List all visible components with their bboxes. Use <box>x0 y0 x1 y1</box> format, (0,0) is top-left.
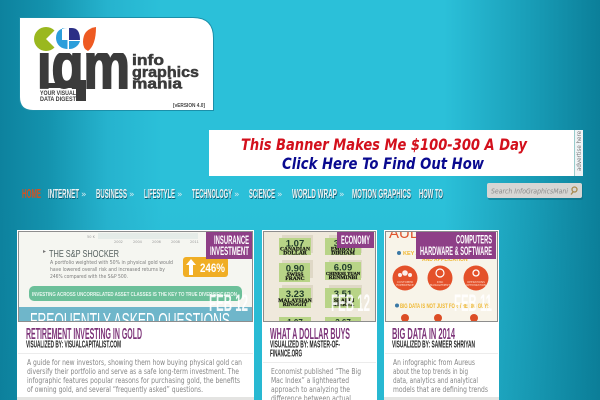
navigation bar: MOTION GRAPHICS <box>352 186 411 201</box>
card 2 thumbnail: CHINESE YUAN <box>326 271 361 276</box>
card 1 description: A guide for new investors, showing them how buying physical gold can <box>27 358 242 367</box>
card 1 thumbnail <box>18 231 253 332</box>
card 2 credit: FINANCE.ORG <box>270 348 302 360</box>
banner call to action: Click Here To Find Out How <box>282 154 484 173</box>
card 2 description: Mac Index” a lighthearted <box>271 376 349 385</box>
navigation bar: SCIENCE <box>249 186 275 201</box>
card 1 description: infographic features popular reasons for purchasing gold, the benefits <box>27 376 240 385</box>
card 2 thumbnail: 3.23 <box>286 289 304 300</box>
card 2: what a dollar buys <box>262 230 377 400</box>
navigation bar: TECHNOLOGY <box>193 187 233 202</box>
icon: coloured logo shapes <box>34 27 96 51</box>
card 2 thumbnail: SWISS <box>287 272 303 278</box>
logo wordmark: graphics <box>132 65 199 81</box>
card 2 thumbnail: 1.07 <box>286 238 304 250</box>
navigation bar: WORLD WRAP <box>293 187 338 202</box>
card 1 thumbnail: 2008 <box>171 240 180 244</box>
logo tagline: DATA DIGEST <box>40 97 76 103</box>
card 1 category tag <box>206 232 252 259</box>
navigation bar: WORLD WRAP <box>292 186 337 201</box>
card 3 category tag: COMPUTERS <box>456 234 492 246</box>
navigation bar: SCIENCE <box>250 187 276 202</box>
card 2: what a dollar buys: VISUALIZED BY: MASTER-OF- <box>270 340 340 350</box>
navigation bar: MOTION GRAPHICS <box>353 187 412 202</box>
navigation bar: » <box>339 190 345 200</box>
card 3 thumbnail: AUD <box>389 225 421 242</box>
card 2 description <box>271 367 361 400</box>
navigation bar: LIFESTYLE <box>144 186 175 201</box>
navigation bar <box>22 186 444 202</box>
navigation bar: » <box>177 190 183 200</box>
card 3: big data in 2014: VISUALIZED BY: SAMEER SHRIYAN <box>392 340 475 350</box>
card 3 description: data, analytics and analytical <box>393 376 478 385</box>
text: HOW TO <box>419 186 443 201</box>
card 1: retirement investing in gold <box>17 230 254 400</box>
card 2 description: approach to analyzing the <box>271 385 350 394</box>
text: HOW TO <box>420 187 444 202</box>
card 2 thumbnail: 3.67 <box>335 318 351 327</box>
icon: magnifier <box>571 187 577 194</box>
card 1 description: of owning gold, and several “frequently asked” questions. <box>27 385 203 394</box>
card 1: retirement investing in gold: FEB 12 <box>209 290 248 317</box>
card 2 thumbnail: RINGGIT <box>283 302 308 308</box>
card 3 thumbnail: BIG DATA IS NOT JUST FOR THE BIG GUYS <box>400 304 490 310</box>
card 1 thumbnail: 246% compared with the S&P 500. <box>50 274 128 280</box>
navigation bar: » <box>81 190 87 200</box>
card 1 description: diversify their portfolio and serve as a safe long-term investment. The <box>27 367 239 376</box>
card 3 category tag <box>416 232 496 259</box>
card 2 category tag: ECONOMY <box>341 235 370 247</box>
card 3 description <box>393 358 488 394</box>
card 3 thumbnail: RISK <box>437 280 443 284</box>
card 3 thumbnail: CUSTOMER <box>397 280 413 284</box>
card 3 thumbnail <box>385 225 498 322</box>
card 2 thumbnail: DOLLAR <box>283 250 308 256</box>
card 2 thumbnail: 0.90 <box>286 264 304 274</box>
card 2 thumbnail: RENMINBI <box>329 275 357 281</box>
search box <box>487 183 583 200</box>
card 1 description <box>27 358 242 394</box>
card 1 thumbnail: 50 K <box>87 235 96 239</box>
logo wordmark: igm <box>37 28 130 102</box>
logo wordmark: info <box>132 53 164 69</box>
card 3 thumbnail: EXPERIENCE <box>396 283 414 287</box>
card 1 thumbnail: THE S&P SHOCKER <box>49 249 119 260</box>
card 2 thumbnail: ISRAELI <box>332 298 354 304</box>
card 3 description: An infographic from Aureus <box>393 358 475 367</box>
card 2 thumbnail <box>263 231 376 327</box>
card 2: what a dollar buys: WHAT A DOLLAR BUYS <box>270 326 350 343</box>
card 2 thumbnail: EMIRATI <box>331 246 355 252</box>
card 2 thumbnail: CANADIAN <box>280 246 310 252</box>
card 2: what a dollar buys: FEB 12 <box>331 290 370 317</box>
navigation bar: BUSINESS <box>97 187 128 202</box>
navigation bar: » <box>129 190 135 200</box>
logo wordmark <box>40 53 198 101</box>
logo tagline <box>40 91 76 103</box>
card 1 thumbnail: have lowered overall risk and increased returns by <box>50 267 165 273</box>
card 2 thumbnail: 6.09 <box>334 262 352 274</box>
navigation bar: INTERNET <box>48 186 79 201</box>
version label: [vERSION 4.0] <box>173 103 205 109</box>
navigation bar: LIFESTYLE <box>145 187 176 202</box>
card 1 category tag: INSURANCE <box>214 235 249 247</box>
card 2 thumbnail: 1.07 <box>287 318 303 327</box>
card 3 description: models that are defining trends <box>393 385 488 394</box>
card 1 thumbnail: 2011 <box>190 240 199 244</box>
card 2 credit <box>270 340 340 360</box>
navigation bar: TECHNOLOGY <box>192 186 232 201</box>
card 3: big data in 2014: BIG DATA IN 2014 <box>392 326 455 343</box>
card 2 thumbnail: 3.67 <box>334 238 352 250</box>
card 3 thumbnail: AND APPLICATION <box>422 257 468 263</box>
card 3 category tag: HARDWARE & SOFTWARE <box>420 246 492 258</box>
card 1 thumbnail: FREQUENTLY ASKED QUESTIONS <box>30 310 230 332</box>
navigation bar: INTERNET <box>49 187 80 202</box>
banner headline: This Banner Makes Me $100-300 A Day <box>241 135 527 154</box>
card 1: retirement investing in gold: VISUALIZED BY: VISUALCAPITALIST.COM <box>26 340 121 350</box>
card 1 category tag: INVESTMENT <box>210 246 249 258</box>
navigation bar: HOME <box>22 186 41 201</box>
card 2 thumbnail: MALAYSIAN <box>278 298 312 304</box>
navigation bar: BUSINESS <box>96 186 127 201</box>
card 2 thumbnail: 3.51 <box>334 289 353 300</box>
card 1 thumbnail: 2004 <box>133 240 143 244</box>
card 1 thumbnail: 246% <box>200 261 225 275</box>
navigation bar: » <box>277 190 283 200</box>
advertise here tab: advertise here <box>576 131 583 171</box>
card 2 thumbnail: DIRHAM <box>331 250 356 256</box>
card 2 description: Economist published “The Big <box>271 367 361 376</box>
banner ad <box>209 130 583 176</box>
logo panel <box>19 17 214 111</box>
advertise here tab <box>574 130 583 176</box>
search box: Search InfoGraphicsMani <box>491 188 568 196</box>
navigation bar: » <box>234 190 240 200</box>
logo tagline: YOUR VISUAL <box>40 91 76 97</box>
card 3 thumbnail: MANAGEMENT <box>430 283 450 287</box>
card 1: retirement investing in gold: RETIREMENT INVESTING IN GOLD <box>26 326 142 343</box>
card 3 thumbnail: KEY AREAS <box>403 251 435 257</box>
card 2 category tag <box>337 232 374 248</box>
card 3: big data in 2014: FEB 11 <box>454 290 492 317</box>
card 3: big data in 2014 <box>384 225 499 400</box>
card 2 thumbnail: SHEKEL <box>332 302 355 308</box>
card 1 thumbnail: 2006 <box>152 240 161 244</box>
card 1 thumbnail: A portfolio weighted with 50% in physical gold would <box>50 260 173 266</box>
card 2 thumbnail: FRANC <box>285 276 305 282</box>
card 3 description: about the top trends in big <box>393 367 468 376</box>
card 3 thumbnail: OPTIMIZATION <box>466 283 486 287</box>
card 3 thumbnail: OPERATIONS <box>467 280 485 284</box>
card 1 thumbnail: INVESTING ACROSS UNCORRELATED ASSET CLASSES IS THE KEY TO TRUE DIVERSIFICATION <box>32 292 237 298</box>
logo wordmark: mania <box>132 76 183 92</box>
card 1 thumbnail: 2002 <box>114 240 123 244</box>
